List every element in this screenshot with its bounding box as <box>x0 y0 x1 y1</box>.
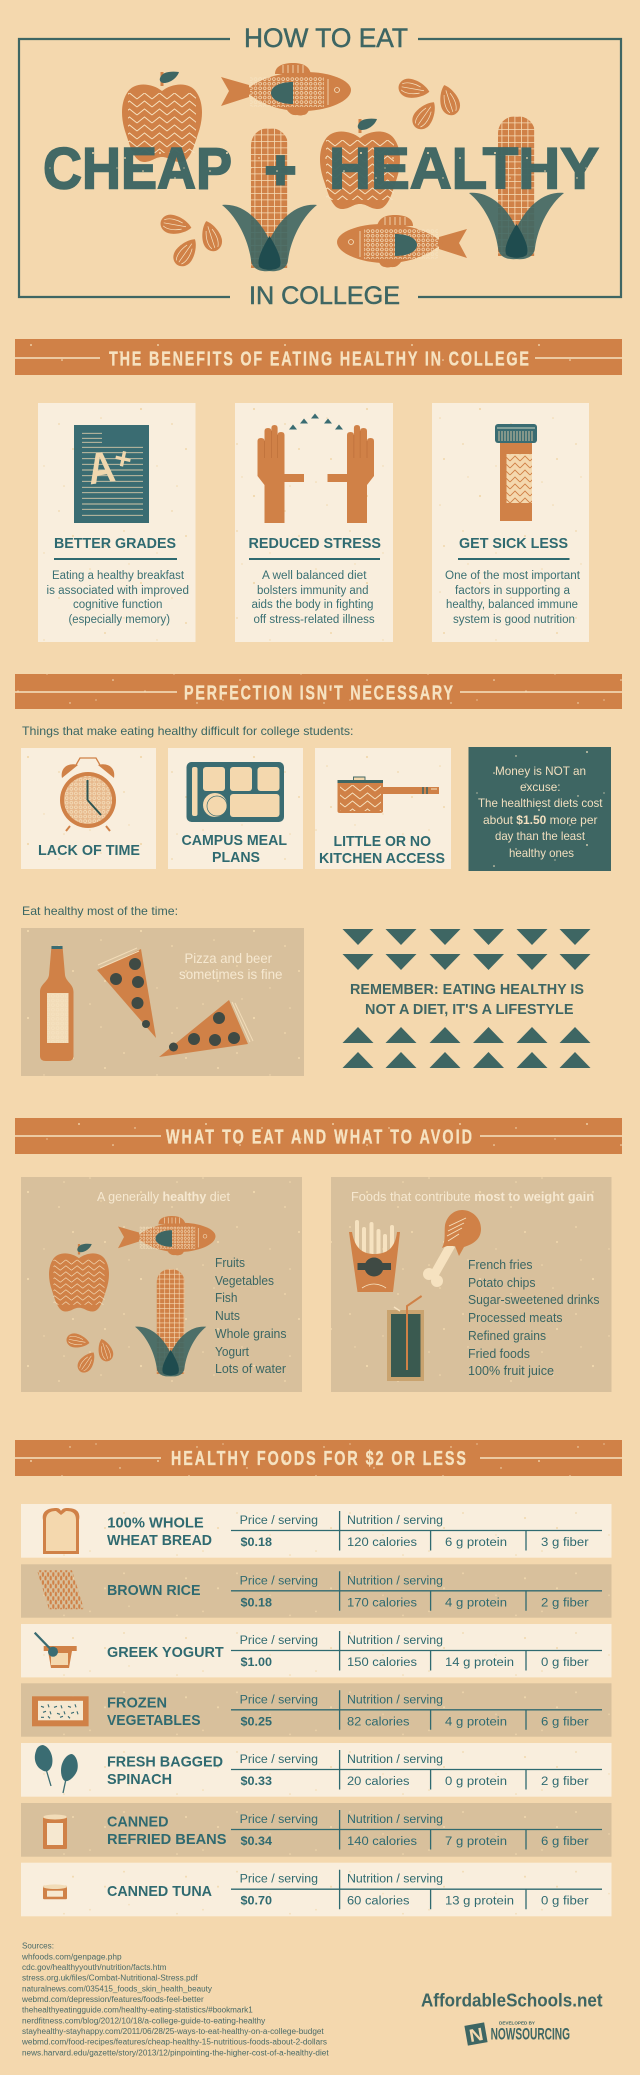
nutrition table: 0 g protein <box>445 1776 507 1788</box>
food list: Whole grains <box>215 1327 286 1341</box>
row: whole wheat bread <box>21 1504 612 1558</box>
panel: kitchen access: KITCHEN ACCESS <box>319 850 445 867</box>
heading: BETTER GRADES <box>54 535 176 552</box>
food name: BROWN RICE <box>107 1582 200 1599</box>
nutrition table: 6 g fiber <box>541 1716 589 1728</box>
caption: LACK OF TIME <box>38 842 140 859</box>
food list: Refined grains <box>468 1329 546 1343</box>
nutrition table: $1.00 <box>240 1657 272 1669</box>
icon: pizza slice two <box>159 1000 253 1057</box>
caption <box>179 950 283 982</box>
nutrition table: 14 g protein <box>445 1657 514 1669</box>
row: frozen vegetables <box>21 1683 612 1737</box>
icon: beer bottle <box>40 946 74 1061</box>
nutrition table: 6 g protein <box>445 1537 507 1549</box>
caption: LITTLE OR NO <box>334 833 431 850</box>
nutrition table: Price / serving <box>240 1515 318 1527</box>
body text: factors in supporting a <box>455 585 571 597</box>
body text: system is good nutrition <box>453 614 575 626</box>
food list: 100% fruit juice <box>468 1364 554 1378</box>
body text: A well balanced diet <box>262 570 367 582</box>
food list: Yogurt <box>215 1345 249 1359</box>
sources list: stayhealthy-stayhappy.com/2011/06/28/25-ways-to-eat-healthy-on-a-college-budget <box>22 2027 324 2036</box>
icon: chicken drumstick <box>423 1210 481 1287</box>
triangles: top rows <box>342 929 590 970</box>
panel: reduced stress <box>235 403 393 642</box>
body text: healthy, balanced immune <box>446 599 578 611</box>
nutrition table <box>231 1511 602 1550</box>
body text: One of the most important <box>445 570 581 582</box>
panel: healthy diet <box>21 1177 302 1392</box>
header: healthy foods: HEALTHY FOODS FOR $2 OR LESS <box>171 1446 466 1470</box>
body text: Eating a healthy breakfast <box>52 570 185 582</box>
nutrition table: 2 g fiber <box>541 1776 589 1788</box>
food name: 100% WHOLE <box>107 1514 204 1531</box>
row: canned tuna <box>21 1863 612 1916</box>
nutrition table <box>231 1631 602 1670</box>
panel: lack of time <box>21 748 156 869</box>
icon: frozen vegetables box <box>32 1696 89 1726</box>
nutrition table: 20 calories <box>347 1776 410 1788</box>
icon: almonds <box>65 1332 115 1376</box>
nutrition table <box>231 1690 602 1730</box>
panel title: A generally healthy diet <box>97 1190 231 1204</box>
row: fresh bagged spinach <box>21 1743 612 1797</box>
icon: A+ paper: + <box>111 441 135 477</box>
icon: fish top <box>221 63 351 116</box>
text: remember: REMEMBER: EATING HEALTHY IS <box>350 981 584 998</box>
icon: apple centre <box>320 119 400 209</box>
panel: campus meal plans <box>168 748 303 869</box>
nutrition table: 82 calories <box>347 1716 410 1728</box>
body text: aids the body in fighting <box>252 599 374 611</box>
callout: money is not an excuse: The healthiest diets cost <box>478 796 603 810</box>
sources list: thehealthyeatingguide.com/healthy-eating-statistics/#bookmark1 <box>22 2006 253 2015</box>
icon: corn <box>135 1269 206 1376</box>
header: perfection <box>15 674 622 709</box>
icon: soda glass <box>387 1296 424 1381</box>
nutrition table: Nutrition / serving <box>347 1575 443 1587</box>
callout: it's a lifestyle <box>342 929 590 1068</box>
food name: FRESH BAGGED <box>107 1754 223 1771</box>
sources list <box>21 1942 329 2057</box>
food list: Lots of water <box>215 1362 286 1376</box>
nutrition table: $0.70 <box>240 1896 272 1908</box>
nutrition table: 0 g fiber <box>541 1657 589 1669</box>
subheading: difficulties: Things that make eating healthy difficult for college students: <box>22 724 354 738</box>
nutrition table: Nutrition / serving <box>347 1515 443 1527</box>
icon: fish <box>118 1216 216 1255</box>
nutrition table: Nutrition / serving <box>347 1694 443 1706</box>
food name: WHEAT BREAD <box>107 1532 212 1549</box>
body text: off stress-related illness <box>254 614 375 626</box>
nutrition table <box>231 1571 602 1611</box>
developed by label: DEVELOPED BY <box>499 2021 536 2027</box>
text: remember: NOT A DIET, IT'S A LIFESTYLE <box>365 1001 574 1018</box>
callout: money is not an excuse: healthy ones <box>509 846 574 860</box>
nutrition table: 140 calories <box>347 1836 417 1848</box>
food list <box>468 1258 600 1378</box>
nutrition table: 120 calories <box>347 1537 417 1549</box>
sources list: whfoods.com/genpage.php <box>21 1952 122 1961</box>
sources list: news.harvard.edu/gazette/story/2013/12/pinpointing-the-higher-cost-of-a-healthy-diet <box>22 2048 329 2057</box>
food name <box>107 1754 223 1788</box>
nutrition table: 60 calories <box>347 1896 410 1908</box>
food name: FROZEN <box>107 1695 167 1712</box>
nutrition table: 4 g protein <box>445 1597 507 1609</box>
nutrition table: $0.33 <box>240 1776 272 1788</box>
nutrition table: 6 g fiber <box>541 1836 589 1848</box>
nutrition table: 7 g protein <box>445 1836 507 1848</box>
nutrition table: Price / serving <box>240 1575 318 1587</box>
food name: CANNED <box>107 1814 169 1831</box>
sources list: stress.org.uk/files/Combat-Nutritional-Stress.pdf <box>22 1974 198 1983</box>
title line: in college: IN COLLEGE <box>249 282 400 310</box>
icon: apple top left <box>122 72 202 162</box>
sources list: cdc.gov/healthyyouth/nutrition/facts.htm <box>22 1963 167 1972</box>
icon: almonds bottom <box>159 213 225 270</box>
nutrition table: 170 calories <box>347 1597 417 1609</box>
icon: saucepan <box>338 777 439 813</box>
header: benefits <box>15 339 622 375</box>
food name <box>107 1695 200 1729</box>
sources list: Sources: <box>22 1942 54 1951</box>
food list <box>215 1256 286 1376</box>
header: perfection: PERFECTION ISN'T NECESSARY <box>184 681 453 704</box>
nutrition table: Price / serving <box>240 1754 318 1766</box>
food list: Sugar-sweetened drinks <box>468 1293 600 1307</box>
title line: cheap + healthy <box>43 136 599 202</box>
icon: bread <box>43 1508 79 1554</box>
icon: pizza slice one <box>97 948 156 1038</box>
nutrition table: Nutrition / serving <box>347 1754 443 1766</box>
body text <box>445 570 581 626</box>
nutrition table: $0.18 <box>240 1537 273 1549</box>
title line: how to eat: HOW TO EAT <box>244 23 408 53</box>
icon: almonds top <box>397 77 463 133</box>
food name: CANNED TUNA <box>107 1883 212 1900</box>
header: benefits: THE BENEFITS OF EATING HEALTHY IN COLLEGE <box>109 347 529 370</box>
food name: REFRIED BEANS <box>107 1831 226 1848</box>
food name <box>107 1814 226 1848</box>
body text: cognitive function <box>73 599 162 611</box>
icon: meal tray <box>186 762 284 822</box>
header: what to eat: WHAT TO EAT AND WHAT TO AVOID <box>166 1125 472 1148</box>
icon: alarm clock <box>60 758 116 831</box>
body text: (especially memory) <box>68 614 170 626</box>
panel: kitchen access <box>315 748 451 869</box>
nutrition table: 0 g fiber <box>541 1896 589 1908</box>
body text <box>46 570 189 626</box>
brand: AffordableSchools.net: AffordableSchools.net <box>421 1990 602 2011</box>
icon: pill bottle <box>495 424 537 521</box>
body text: is associated with improved <box>46 585 189 597</box>
nutrition table: Nutrition / serving <box>347 1635 443 1647</box>
food list: Processed meats <box>468 1311 562 1325</box>
nutrition table: 13 g protein <box>445 1896 514 1908</box>
panel: better grades <box>38 403 196 642</box>
body text: bolsters immunity and <box>257 585 368 597</box>
row: brown rice <box>21 1564 612 1618</box>
row: canned refried beans <box>21 1803 612 1857</box>
panel: campus meal plans: PLANS <box>212 849 260 866</box>
title line: cheap + healthy: CHEAP <box>43 136 232 202</box>
panel title: Foods that contribute most to weight gain <box>351 1190 594 1204</box>
callout: money is not an excuse: excuse: <box>520 780 560 794</box>
sources list: nerdfitness.com/blog/2012/10/18/a-college-guide-to-eating-healthy <box>22 2016 265 2025</box>
triangles: bottom rows <box>342 1027 590 1068</box>
food list: Potato chips <box>468 1276 536 1290</box>
row: greek yogurt <box>21 1624 612 1677</box>
caption: sometimes is fine <box>179 966 283 982</box>
icon: A+ paper <box>74 425 149 523</box>
nutrition table: 2 g fiber <box>541 1597 589 1609</box>
nutrition table: Price / serving <box>240 1814 318 1826</box>
nutrition table: Price / serving <box>240 1635 318 1647</box>
title frame <box>19 39 621 297</box>
heading: GET SICK LESS <box>459 535 568 552</box>
icon: yogurt and spoon <box>35 1633 77 1668</box>
icon: french fries <box>349 1222 400 1292</box>
panel: weight gain foods <box>331 1177 612 1392</box>
panel: pizza and beer <box>21 928 304 1076</box>
food list: Vegetables <box>215 1274 274 1288</box>
callout: money is not an excuse <box>468 747 611 871</box>
icon: tuna can <box>43 1884 67 1899</box>
panel: get sick less <box>432 403 589 642</box>
icon: N mark: N <box>468 2024 485 2046</box>
nutrition table: Nutrition / serving <box>347 1814 443 1826</box>
nutrition table: Price / serving <box>240 1694 318 1706</box>
callout: money is not an excuse: day than the least <box>495 829 586 843</box>
nutrition table: $0.25 <box>240 1716 273 1728</box>
icon: A+ paper: A <box>84 442 118 494</box>
title line: cheap + healthy: HEALTHY <box>329 136 599 202</box>
title block <box>19 23 621 310</box>
nutrition table: Price / serving <box>240 1874 318 1886</box>
food name <box>107 1514 212 1549</box>
callout: money is not an excuse: about $1.50 more per <box>483 813 598 827</box>
icon: corn right <box>469 116 564 259</box>
nutrition table: $0.18 <box>240 1597 273 1609</box>
icon: rice <box>37 1570 84 1609</box>
nutrition table: 150 calories <box>347 1657 417 1669</box>
callout: money is not an excuse: Money is NOT an <box>495 764 586 778</box>
text: remember <box>350 981 584 1018</box>
nutrition table <box>231 1810 602 1850</box>
icon: bean can <box>43 1814 67 1849</box>
brand: Nowsourcing logo <box>464 2021 570 2047</box>
body text <box>252 570 375 626</box>
caption: Pizza and beer <box>184 950 272 966</box>
food list: Fried foods <box>468 1347 530 1361</box>
subheading: eat healthy: Eat healthy most of the time: <box>22 904 178 918</box>
wordmark: NOWSOURCING <box>491 2024 570 2043</box>
caption: CAMPUS MEAL <box>182 832 287 849</box>
sources list: webmd.com/depression/features/foods-feel-better <box>21 1995 204 2004</box>
header: what to eat <box>15 1118 622 1154</box>
icon: corn left <box>222 128 317 271</box>
title speckle texture <box>42 148 600 189</box>
heading: REDUCED STRESS <box>248 535 381 552</box>
food name: VEGETABLES <box>107 1712 200 1729</box>
nutrition table: 3 g fiber <box>541 1537 589 1549</box>
food list: Fruits <box>215 1256 245 1270</box>
nutrition table: Nutrition / serving <box>347 1874 443 1886</box>
food name: GREEK YOGURT <box>107 1644 224 1661</box>
sources list: webmd.com/food-recipes/features/cheap-healthy-15-nutritious-foods-about-2-dollars <box>21 2038 327 2047</box>
icon: raised hands <box>258 414 374 523</box>
header: healthy foods <box>15 1440 622 1476</box>
food name: SPINACH <box>107 1771 172 1788</box>
icon: spinach leaves <box>35 1745 78 1793</box>
nutrition table: $0.34 <box>240 1836 273 1848</box>
food list: Fish <box>215 1291 238 1305</box>
nutrition table <box>231 1870 602 1909</box>
food list: Nuts <box>215 1309 240 1323</box>
nutrition table: 4 g protein <box>445 1716 507 1728</box>
sources list: naturalnews.com/035415_foods_skin_health_beauty <box>22 1984 212 1993</box>
icon: fish bottom <box>337 215 467 268</box>
title line: cheap + healthy: + <box>265 140 296 200</box>
food list: French fries <box>468 1258 532 1272</box>
icon: apple <box>49 1244 109 1312</box>
nutrition table <box>231 1750 602 1790</box>
